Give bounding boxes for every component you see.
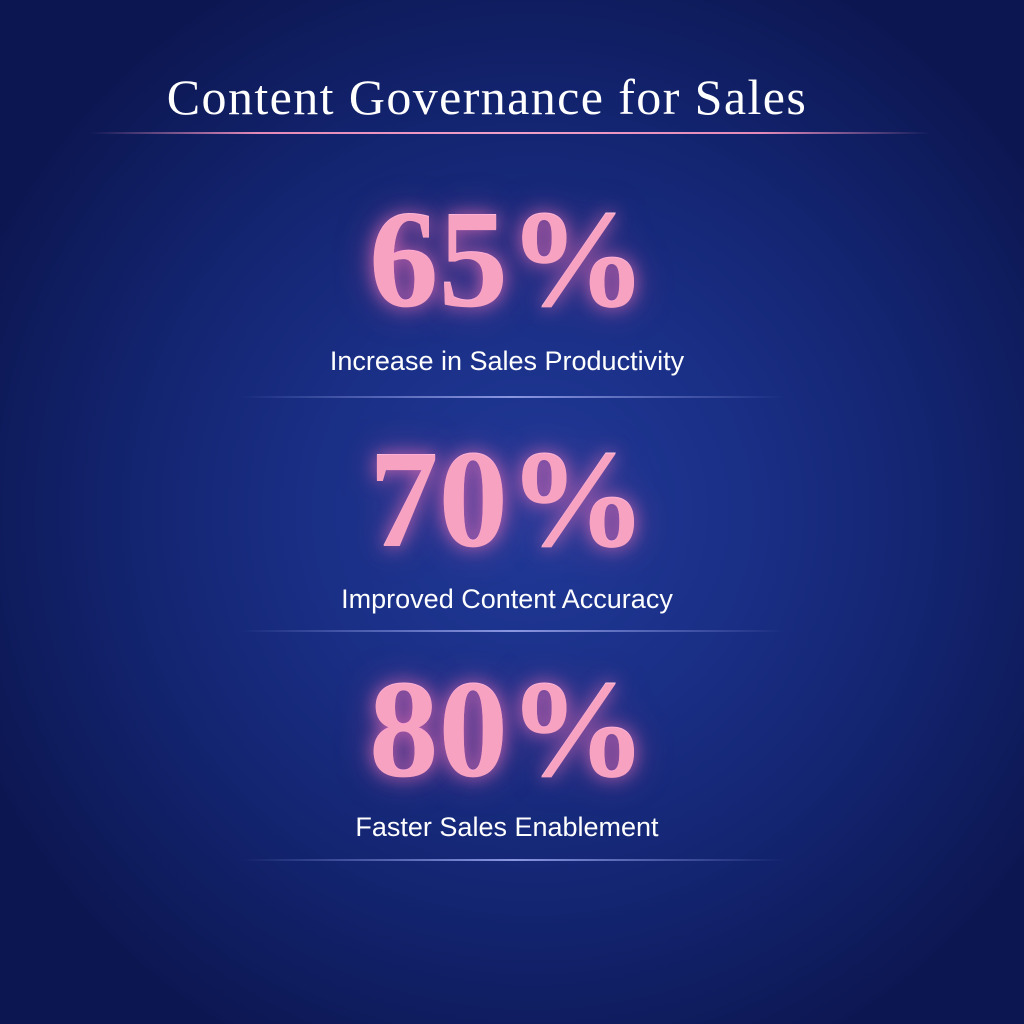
divider 3 <box>240 859 785 861</box>
title underline <box>90 132 930 134</box>
label: accuracy: Improved Content Accuracy <box>341 584 673 614</box>
label: productivity: Increase in Sales Productivity <box>330 346 684 376</box>
title: Content Governance for Sales <box>167 69 807 125</box>
stat: 70%: 70% <box>369 423 647 577</box>
divider 1 <box>240 396 785 398</box>
label: enablement: Faster Sales Enablement <box>355 812 659 842</box>
stat: 80%: 80% <box>369 653 647 807</box>
stat: 65%: 65% <box>369 183 647 337</box>
divider 2 <box>240 630 785 632</box>
